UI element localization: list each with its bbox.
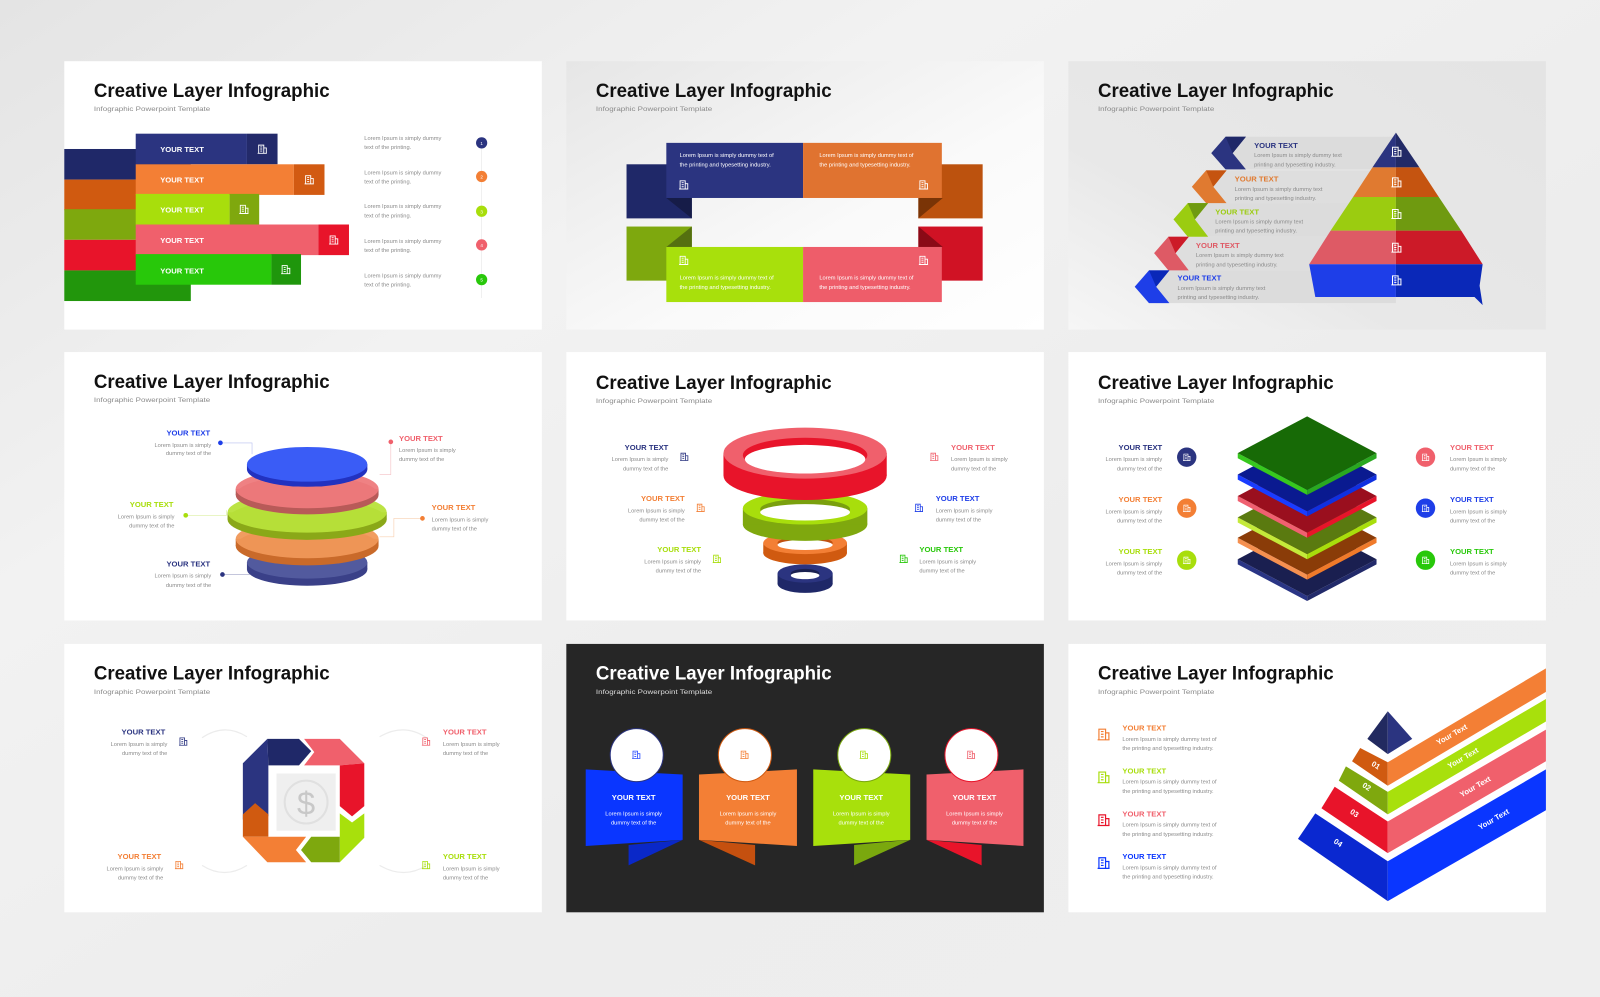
callouts: YOUR TEXT [443, 728, 487, 737]
right list with numbered dots: 2 [480, 175, 483, 180]
right list with numbered dots: text of the printing. [364, 213, 412, 219]
callouts left: Lorem Ipsum is simply [644, 559, 701, 565]
front bars: YOUR TEXT [160, 176, 204, 185]
subtitle: Infographic Powerpoint Template [596, 106, 713, 113]
callout: top left [154, 429, 252, 457]
panel 7: circular arrow square [64, 644, 542, 912]
card 1: YOUR TEXT [612, 793, 656, 802]
back block stripes [64, 149, 191, 301]
callout: bottom left: Lorem Ipsum is simply [154, 574, 211, 580]
title: Creative Layer Infographic [596, 372, 832, 394]
callouts left [1106, 443, 1196, 577]
callouts left: Lorem Ipsum is simply [1106, 457, 1162, 463]
subtitle: Infographic Powerpoint Template [1098, 689, 1215, 696]
title: Creative Layer Infographic [94, 663, 330, 685]
right list with numbered dots: Lorem Ipsum is simply dummy [364, 136, 441, 142]
top boxes: the printing and typesetting industry. [680, 162, 771, 168]
pyramid bands: 01 [1370, 759, 1382, 772]
callouts left: dummy text of the [623, 466, 668, 472]
top boxes: Lorem Ipsum is simply dummy text of [819, 153, 914, 159]
callouts left: Lorem Ipsum is simply [612, 457, 669, 463]
callouts left: YOUR TEXT [1119, 495, 1163, 504]
callout: middle right: YOUR TEXT [432, 503, 476, 512]
panel 6: stacked diamond layers [1068, 352, 1546, 620]
top boxes [666, 143, 942, 198]
callouts left: YOUR TEXT [641, 494, 685, 503]
callouts right [899, 443, 1008, 574]
callouts right: Lorem Ipsum is simply [1450, 509, 1507, 515]
card 3: YOUR TEXT [839, 793, 883, 802]
subtitle: Infographic Powerpoint Template [94, 397, 211, 404]
card 1: Lorem Ipsum is simply [605, 811, 662, 817]
card 2: Lorem Ipsum is simply [720, 811, 776, 817]
panel 8: dark cards [566, 644, 1044, 912]
card 2: dummy text of the [725, 821, 771, 827]
right list with numbered dots: text of the printing. [364, 283, 412, 289]
callouts left: dummy text of the [656, 568, 701, 574]
right list with numbered dots: 4 [480, 243, 483, 248]
text rows with chevrons: printing and typesetting industry. [1196, 262, 1278, 268]
right list with numbered dots: 5 [480, 278, 483, 283]
callouts right: YOUR TEXT [1450, 443, 1494, 452]
list: Lorem Ipsum is simply dummy text of [1122, 780, 1217, 786]
pyramid [1309, 133, 1483, 305]
pyramid bands: 02 [1361, 781, 1373, 793]
card 2: YOUR TEXT [726, 793, 770, 802]
pyramid bands: Your Text [1477, 807, 1511, 832]
bottom boxes [666, 247, 942, 302]
callouts right: dummy text of the [1450, 466, 1495, 472]
callouts right: dummy text of the [951, 466, 996, 472]
subtitle: Infographic Powerpoint Template [596, 398, 713, 405]
title: Creative Layer Infographic [1098, 372, 1334, 394]
callout: bottom left [154, 559, 250, 589]
front bars: YOUR TEXT [160, 205, 204, 214]
card 1: dummy text of the [611, 821, 656, 827]
callouts right: YOUR TEXT [919, 545, 963, 554]
callouts left: Lorem Ipsum is simply [1106, 561, 1162, 567]
callout: top right: Lorem Ipsum is simply [399, 448, 456, 454]
front bars: YOUR TEXT [160, 266, 204, 275]
rings [723, 428, 887, 593]
callouts [107, 728, 500, 882]
discs [228, 447, 387, 586]
list: the printing and typesetting industry. [1122, 746, 1214, 752]
pyramid bands: Your Text [1446, 745, 1480, 771]
card 3: dummy text of the [839, 821, 884, 827]
callouts right: dummy text of the [1450, 518, 1495, 524]
pyramid bands: 03 [1348, 807, 1360, 819]
list: YOUR TEXT [1122, 724, 1167, 733]
right list with numbered dots: text of the printing. [364, 145, 412, 151]
panel 1: layered bars [64, 61, 542, 330]
title: Creative Layer Infographic [1098, 663, 1334, 685]
card 4 [927, 729, 1023, 865]
callouts: dummy text of the [443, 876, 488, 882]
callout: top right: dummy text of the [399, 457, 444, 463]
card 1 [586, 729, 683, 865]
callout: top left: YOUR TEXT [166, 429, 211, 438]
front bars [136, 134, 349, 285]
callouts right: YOUR TEXT [1450, 495, 1494, 504]
text rows with chevrons: Lorem Ipsum is simply dummy text [1254, 153, 1342, 159]
callouts left: YOUR TEXT [1119, 443, 1163, 452]
panel 5: funnel rings [566, 352, 1044, 620]
callout: middle left: dummy text of the [129, 524, 174, 530]
panel 9: isometric pyramid bands [1068, 644, 1546, 912]
callout: middle left: YOUR TEXT [130, 500, 174, 509]
title: Creative Layer Infographic [596, 80, 832, 102]
callout: bottom left: YOUR TEXT [166, 559, 211, 568]
text rows with chevrons: Lorem Ipsum is simply dummy text [1178, 286, 1266, 292]
pyramid bands: 04 [1332, 837, 1345, 849]
callout: middle left [118, 500, 227, 530]
callouts left: dummy text of the [639, 517, 685, 523]
right list with numbered dots: 3 [480, 209, 483, 214]
callouts: dummy text of the [443, 751, 488, 757]
right list with numbered dots: text of the printing. [364, 180, 412, 186]
subtitle: Infographic Powerpoint Template [1098, 398, 1215, 405]
callouts left: YOUR TEXT [625, 443, 669, 452]
card 3 [813, 729, 910, 865]
callouts left: dummy text of the [1117, 571, 1162, 577]
title: Creative Layer Infographic [94, 80, 330, 102]
text rows with chevrons: YOUR TEXT [1235, 175, 1279, 184]
subtitle: Infographic Powerpoint Template [596, 689, 713, 696]
callouts left [612, 443, 721, 574]
callouts right [1416, 443, 1507, 577]
callout: top left: dummy text of the [166, 451, 211, 457]
card 2 [699, 729, 797, 865]
top boxes: the printing and typesetting industry. [819, 162, 911, 168]
right list with numbered dots: 1 [480, 141, 483, 146]
subtitle: Infographic Powerpoint Template [94, 689, 211, 696]
callouts: YOUR TEXT [122, 728, 166, 737]
list: Lorem Ipsum is simply dummy text of [1122, 823, 1217, 829]
callout: top right: YOUR TEXT [399, 434, 443, 443]
right list with numbered dots: Lorem Ipsum is simply dummy [364, 239, 441, 245]
callout: middle left: Lorem Ipsum is simply [118, 514, 175, 520]
callouts: dummy text of the [122, 751, 167, 757]
top boxes: Lorem Ipsum is simply dummy text of [680, 153, 774, 159]
text rows with chevrons: Lorem Ipsum is simply dummy text [1196, 253, 1284, 259]
list: YOUR TEXT [1122, 767, 1167, 776]
arrow octagon: $ [297, 784, 315, 821]
pyramid bands: Your Text [1435, 722, 1469, 747]
card 3: Lorem Ipsum is simply [833, 811, 890, 817]
callout: top right [380, 434, 456, 475]
text rows with chevrons: printing and typesetting industry. [1178, 295, 1260, 301]
list: Lorem Ipsum is simply dummy text of [1122, 865, 1217, 871]
callouts left: dummy text of the [1117, 466, 1162, 472]
text rows with chevrons: YOUR TEXT [1196, 241, 1240, 250]
bottom boxes: the printing and typesetting industry. [819, 285, 911, 291]
panel 2: folded ribbon boxes [566, 61, 1044, 330]
title: Creative Layer Infographic [1098, 80, 1334, 102]
list: the printing and typesetting industry. [1122, 832, 1214, 838]
callout: top left: Lorem Ipsum is simply [154, 443, 211, 449]
callout: middle right: Lorem Ipsum is simply [432, 517, 489, 523]
callouts right: dummy text of the [919, 568, 965, 574]
callouts: Lorem Ipsum is simply [107, 866, 163, 872]
callout: bottom left: dummy text of the [166, 583, 211, 589]
bottom boxes: Lorem Ipsum is simply dummy text of [819, 276, 914, 282]
list: Lorem Ipsum is simply dummy text of [1122, 737, 1217, 743]
callouts: Lorem Ipsum is simply [443, 866, 500, 872]
diamond stack [1238, 416, 1377, 601]
text rows with chevrons: printing and typesetting industry. [1215, 229, 1297, 235]
list: YOUR TEXT [1122, 809, 1167, 818]
text rows with chevrons: printing and typesetting industry. [1254, 162, 1336, 168]
front bars: YOUR TEXT [160, 145, 204, 154]
right list with numbered dots: Lorem Ipsum is simply dummy [364, 274, 441, 280]
right list with numbered dots: text of the printing. [364, 248, 412, 254]
bottom boxes: Lorem Ipsum is simply dummy text of [680, 276, 774, 282]
card 4: YOUR TEXT [953, 793, 997, 802]
panel 4: stacked discs [64, 352, 542, 620]
list: the printing and typesetting industry. [1122, 875, 1214, 881]
callouts left: YOUR TEXT [657, 545, 701, 554]
callouts left: Lorem Ipsum is simply [1106, 509, 1162, 515]
pyramid bands [1298, 668, 1546, 901]
card 4: Lorem Ipsum is simply [946, 811, 1003, 817]
callouts right: YOUR TEXT [936, 494, 980, 503]
text rows with chevrons: printing and typesetting industry. [1235, 196, 1317, 202]
text rows with chevrons: YOUR TEXT [1215, 207, 1259, 216]
callouts right: Lorem Ipsum is simply [936, 508, 993, 514]
right list with numbered dots: Lorem Ipsum is simply dummy [364, 171, 441, 177]
card 4: dummy text of the [952, 821, 997, 827]
subtitle: Infographic Powerpoint Template [94, 106, 211, 113]
callouts left: dummy text of the [1117, 518, 1162, 524]
text rows with chevrons: YOUR TEXT [1178, 274, 1222, 283]
text rows with chevrons: Lorem Ipsum is simply dummy text [1235, 187, 1323, 193]
front bars: YOUR TEXT [160, 236, 204, 245]
text rows with chevrons: YOUR TEXT [1254, 141, 1298, 150]
callout: middle right [380, 503, 489, 537]
title: Creative Layer Infographic [596, 663, 832, 685]
callouts right: dummy text of the [936, 517, 981, 523]
callouts left: YOUR TEXT [1119, 547, 1163, 556]
arrow octagon [243, 739, 364, 862]
callouts right: Lorem Ipsum is simply [919, 559, 976, 565]
ribbon folds [627, 164, 983, 281]
callouts: Lorem Ipsum is simply [443, 742, 500, 748]
callouts: Lorem Ipsum is simply [111, 742, 167, 748]
callouts right: Lorem Ipsum is simply [951, 457, 1008, 463]
list: YOUR TEXT [1122, 852, 1167, 861]
decorative curved arrows [202, 730, 427, 873]
panel 3: pyramid with chevrons [1068, 61, 1546, 330]
subtitle: Infographic Powerpoint Template [1098, 106, 1215, 113]
text rows with chevrons [1135, 137, 1396, 303]
callouts right: Lorem Ipsum is simply [1450, 561, 1507, 567]
right list with numbered dots: Lorem Ipsum is simply dummy [364, 204, 441, 210]
list [1098, 724, 1217, 881]
callouts right: YOUR TEXT [951, 443, 995, 452]
callout: middle right: dummy text of the [432, 527, 477, 533]
title: Creative Layer Infographic [94, 371, 330, 393]
text rows with chevrons: Lorem Ipsum is simply dummy text [1215, 219, 1304, 225]
right list with numbered dots [364, 136, 487, 298]
pyramid bands: Your Text [1458, 774, 1493, 799]
list: the printing and typesetting industry. [1122, 789, 1214, 795]
callouts right: dummy text of the [1450, 571, 1495, 577]
callouts left: Lorem Ipsum is simply [628, 508, 685, 514]
callouts: YOUR TEXT [443, 852, 487, 861]
callouts right: YOUR TEXT [1450, 547, 1494, 556]
bottom boxes: the printing and typesetting industry. [680, 285, 771, 291]
callouts: dummy text of the [118, 876, 163, 882]
callouts right: Lorem Ipsum is simply [1450, 457, 1507, 463]
callouts: YOUR TEXT [117, 852, 162, 861]
